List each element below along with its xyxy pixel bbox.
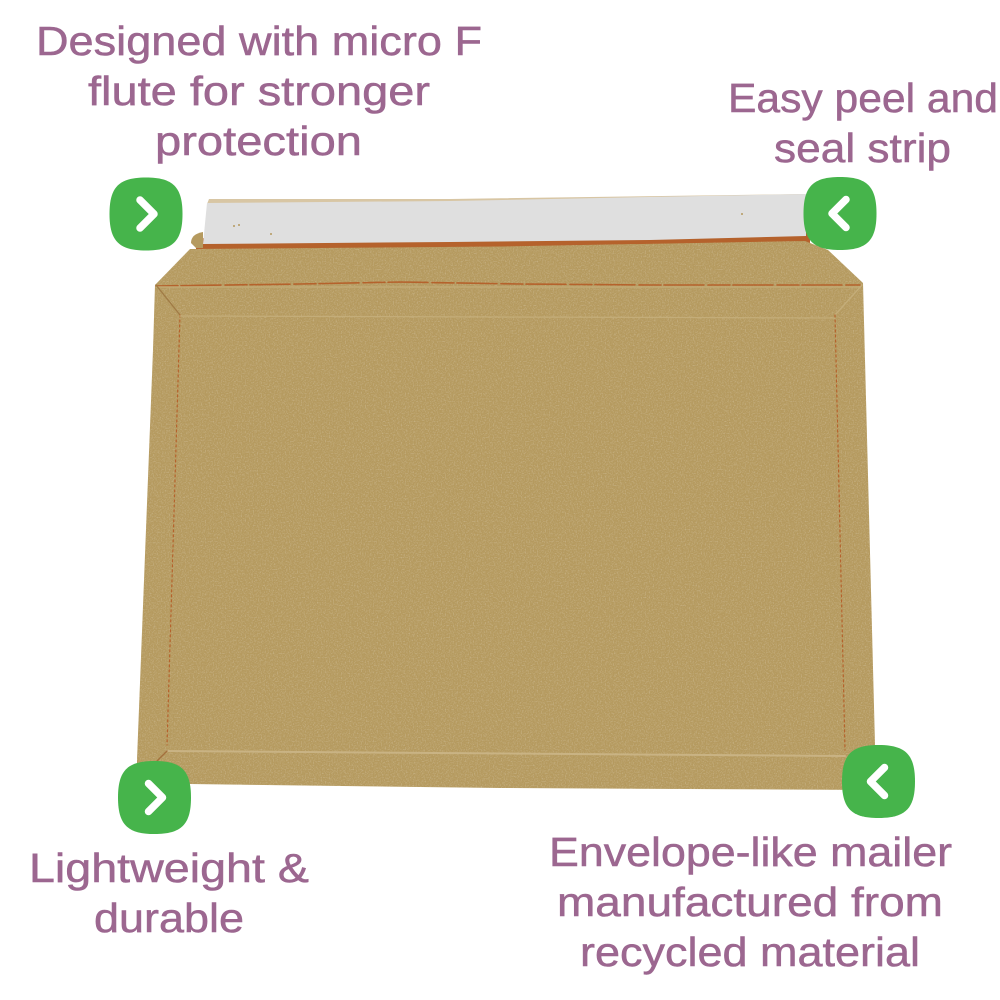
envelope body (137, 241, 875, 790)
icon: green right chevron button, bottom left (118, 761, 191, 834)
panel: kraft envelope mailer (137, 194, 875, 790)
text: recycled material callout (549, 829, 952, 975)
fold lines (156, 282, 862, 761)
icon: green left chevron button, bottom right (842, 745, 915, 818)
text: peel and seal callout: seal strip (774, 125, 951, 171)
title: micro F flute callout text: flute for stronger (88, 68, 430, 114)
icon: green right chevron button, top left (110, 178, 182, 250)
peel strip backing (191, 194, 810, 252)
title: micro F flute callout text: Designed with micro F (36, 18, 482, 64)
text: peel and seal callout: Easy peel and (728, 75, 998, 121)
title: micro F flute callout text (36, 18, 482, 164)
text: recycled material callout: Envelope-like mailer (549, 829, 952, 875)
icon: green left chevron button, top right (804, 177, 876, 250)
text: lightweight callout: durable (94, 895, 244, 941)
text: lightweight callout: Lightweight & (29, 845, 309, 891)
title: micro F flute callout text: protection (155, 118, 362, 164)
paper grain texture (137, 241, 875, 790)
text: recycled material callout: recycled material (580, 929, 920, 975)
text: recycled material callout: manufactured from (557, 879, 943, 925)
text: lightweight callout (29, 845, 309, 941)
text: peel and seal callout (728, 75, 998, 171)
